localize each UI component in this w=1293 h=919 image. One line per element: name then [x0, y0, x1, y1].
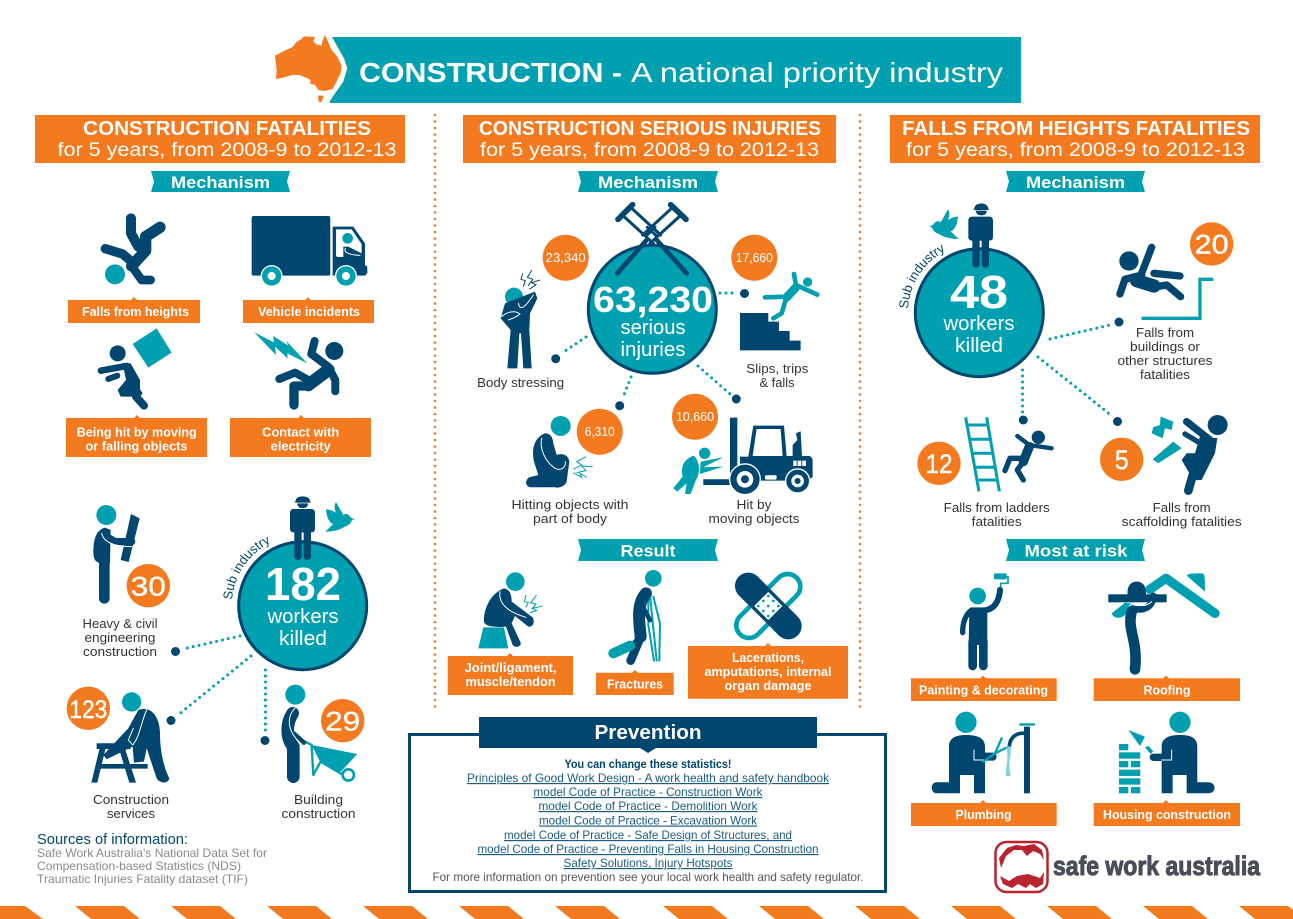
ribbon: mechanism: Mechanism [598, 174, 698, 192]
label: falls from buildings or other structures fatalities: fatalities [1140, 368, 1190, 382]
ribbon: mechanism [578, 171, 718, 192]
ribbon: mechanism [151, 171, 290, 192]
icon: crossed crutches [617, 205, 687, 273]
heading: falls from heights: FALLS FROM HEIGHTS FATALITIES [902, 118, 1250, 140]
dotted connector: slips, trips and falls [720, 289, 749, 298]
dotted connector: hit by moving objects [698, 366, 741, 404]
icon: bricklayer [1119, 712, 1215, 793]
dotted connector: falls from buildings [1050, 318, 1124, 339]
label: contact with electricity: Contact with [262, 426, 339, 440]
panel: prevention [410, 717, 886, 892]
title text: CONSTRUCTION - [359, 57, 622, 88]
logo: safe work australia [996, 842, 1261, 892]
curved label: sub industry: Sub industry [223, 536, 269, 600]
icon: falling from ladder [966, 417, 1052, 491]
central circle: 63,230 serious injuries [588, 245, 716, 373]
label: building construction: construction [282, 807, 356, 821]
label: joint/ligament, muscle/tendon: muscle/tendon [466, 675, 556, 689]
label: contact with electricity [230, 415, 371, 457]
label: painting and decorating [911, 676, 1057, 701]
label: falls from ladders fatalities [944, 501, 1050, 529]
label: hitting objects with part of body: part of body [533, 512, 608, 526]
icon: joint and muscle pain [478, 572, 543, 648]
sources of information: Safe Work Australia's National Data Set for [37, 847, 267, 860]
label: lacerations, amputations, internal organ damage: organ damage [724, 679, 812, 693]
icon: crossed bandages [729, 567, 807, 645]
label: falls from buildings or other structures fatalities [1118, 326, 1212, 382]
number badge: 6,310: 6,310 [585, 424, 615, 439]
label: plumbing: Plumbing [956, 808, 1012, 822]
number badge: 17,660 [731, 235, 777, 281]
label: falls from scaffolding fatalities [1122, 501, 1242, 529]
regulator note: For more information on prevention see your local work health and safety regulator. [432, 871, 864, 884]
icon: engineer with plans [93, 505, 140, 598]
number badge: 12 [917, 442, 961, 485]
icon: worker with hard hat standing on circle [290, 496, 315, 556]
title banner [270, 32, 1021, 103]
label: fractures [596, 670, 674, 695]
number badge: 20: 20 [1195, 230, 1229, 260]
icon: falling from building [1119, 247, 1213, 318]
label: falls from ladders fatalities: Falls from ladders [944, 501, 1050, 515]
label: lacerations, amputations, internal organ damage: Lacerations, [732, 651, 804, 665]
label: heavy and civil engineering construction: Heavy & civil [82, 617, 158, 631]
label: being hit by moving or falling objects: Being hit by moving [77, 426, 197, 440]
prevention call to action: You can change these statistics! [564, 758, 732, 771]
label: joint/ligament, muscle/tendon: Joint/ligament, [464, 661, 556, 675]
label: fractures: Fractures [607, 678, 663, 692]
heading: prevention: Prevention [594, 722, 702, 744]
label: hitting objects with part of body [512, 498, 629, 526]
heading: construction fatalities: CONSTRUCTION FATALITIES [83, 118, 371, 140]
icon: truck [252, 216, 367, 287]
number badge: 29 [321, 699, 364, 742]
list of prevention links: Safety Solutions, Injury Hotspots [564, 857, 733, 870]
icon: contact with electricity [254, 332, 343, 405]
label: falls from scaffolding fatalities: scaffolding fatalities [1122, 515, 1242, 529]
icon: falls from heights [105, 218, 160, 284]
heading: serious injuries [463, 115, 836, 163]
ribbon: mechanism: Mechanism [171, 174, 270, 192]
icon: dove [929, 209, 959, 239]
sources of information: Sources of information: [37, 831, 188, 848]
icon: body stressing [501, 270, 540, 368]
heading: prevention [479, 717, 817, 753]
number badge: 10,660: 10,660 [676, 409, 714, 424]
icon: roofer [1108, 573, 1215, 669]
curved label: sub industry: Sub industry [899, 244, 944, 308]
label: housing construction [1094, 800, 1240, 826]
label: body stressing: Body stressing [477, 376, 564, 390]
label: hit by moving objects: moving objects [708, 512, 800, 526]
list of prevention links: model Code of Practice - Preventing Falls in Housing Construction [478, 843, 818, 856]
label: joint/ligament, muscle/tendon [448, 653, 573, 695]
label: plumbing [911, 800, 1057, 826]
icon: worker with wheelbarrow [285, 685, 357, 781]
sub industry circle: 48 workers killed: 48 [950, 266, 1008, 318]
ribbon: most at risk [1006, 539, 1145, 561]
title text: A national priority industry [631, 57, 1003, 88]
logo: safe work australia: safe work australia [1053, 851, 1261, 881]
panel: construction serious injuries [448, 115, 848, 699]
central circle: 63,230 serious injuries: serious [620, 317, 686, 339]
ribbon: result [578, 539, 718, 561]
label: falls from buildings or other structures fatalities: buildings or [1130, 340, 1200, 354]
label: vehicle incidents [243, 297, 374, 323]
sources of information: Compensation-based Statistics (NDS) [37, 860, 241, 873]
dotted connector: construction services [166, 656, 251, 725]
icon: dove [325, 502, 355, 532]
number badge: 123: 123 [69, 696, 107, 724]
dotted connector: building construction [260, 670, 270, 745]
heading: construction fatalities: for 5 years, from 2008-9 to 2012-13 [58, 140, 396, 161]
label: falls from ladders fatalities: fatalities [972, 515, 1022, 529]
bottom hazard stripes [0, 906, 1293, 919]
number badge: 10,660 [672, 394, 718, 440]
number badge: 6,310 [577, 409, 623, 455]
number badge: 23,340: 23,340 [546, 250, 586, 265]
list of prevention links: model Code of Practice - Construction Work [534, 786, 763, 799]
number badge: 29: 29 [325, 706, 360, 736]
icon: worker with hard hat standing on circle [968, 203, 993, 264]
label: vehicle incidents: Vehicle incidents [258, 305, 360, 319]
label: slips, trips and falls: Slips, trips [746, 362, 808, 376]
sub industry circle: 48 workers killed: workers [942, 313, 1014, 335]
icon: map of Australia [270, 32, 347, 103]
label: construction services: services [107, 807, 155, 821]
panel: construction fatalities [35, 115, 405, 917]
ribbon: result: Result [620, 542, 676, 560]
sub industry circle: 48 workers killed: killed [955, 335, 1003, 357]
label: falls from buildings or other structures fatalities: other structures [1118, 354, 1212, 368]
label: falls from heights [68, 297, 200, 323]
label: falls from scaffolding fatalities: Falls from [1153, 501, 1211, 515]
icon: painter [963, 573, 1008, 666]
heading: construction fatalities [35, 115, 405, 163]
icon: being hit by falling object [101, 328, 172, 406]
heading: falls from heights: for 5 years, from 2008-9 to 2012-13 [906, 140, 1245, 161]
dotted connector: body stressing [551, 337, 586, 363]
list of prevention links: Principles of Good Work Design - A work health and safety handbook [467, 772, 829, 785]
number badge: 12: 12 [926, 449, 952, 479]
sub industry circle: 182 workers killed: 182 [265, 558, 341, 610]
label: being hit by moving or falling objects [66, 415, 207, 457]
list of prevention links: model Code of Practice - Demolition Work [538, 800, 758, 813]
icon: worker at sawhorse [91, 692, 169, 783]
title text [359, 57, 1003, 88]
number badge: 5 [1100, 438, 1143, 481]
heading: serious injuries: CONSTRUCTION SERIOUS INJURIES [479, 118, 821, 140]
sub industry circle: 182 workers killed [239, 542, 367, 670]
label: slips, trips and falls: & falls [760, 376, 794, 390]
sources of information [37, 831, 267, 886]
label: hit by moving objects: Hit by [736, 498, 772, 512]
dotted connector: falls from scaffolding [1038, 357, 1122, 426]
label: heavy and civil engineering construction: engineering [84, 631, 156, 645]
list of prevention links: model Code of Practice - Excavation Work [539, 814, 757, 828]
dotted connector: falls from ladders [1019, 370, 1028, 424]
ribbon: most at risk: Most at risk [1024, 542, 1128, 560]
icon: falling from scaffolding [1152, 415, 1228, 491]
label: painting and decorating: Painting & decorating [919, 684, 1048, 698]
label: falls from buildings or other structures fatalities: Falls from [1136, 326, 1194, 340]
sub industry circle: 182 workers killed: workers [266, 606, 338, 628]
heading: falls from heights [890, 115, 1260, 163]
dotted connector: heavy and civil [171, 636, 240, 656]
label: roofing [1094, 676, 1240, 701]
number badge: 17,660: 17,660 [736, 250, 773, 265]
label: housing construction: Housing construction [1103, 808, 1231, 822]
number badge: 30 [127, 564, 170, 607]
central circle: 63,230 serious injuries: injuries [620, 339, 686, 361]
number badge: 5: 5 [1115, 445, 1129, 475]
list of prevention links: model Code of Practice - Safe Design of Structures, and [504, 829, 792, 842]
label: heavy and civil engineering construction: construction [83, 645, 157, 659]
icon: hitting objects with part of body [526, 416, 593, 488]
icon: hit by forklift [673, 418, 813, 495]
label: lacerations, amputations, internal organ damage [688, 643, 848, 699]
sub industry circle: 182 workers killed: killed [279, 628, 327, 650]
number badge: 123 [67, 687, 110, 730]
sub industry circle: 48 workers killed [915, 249, 1043, 377]
label: roofing: Roofing [1144, 684, 1190, 698]
label: hitting objects with part of body: Hitting objects with [512, 498, 629, 512]
icon: slips, trips and falls [740, 274, 817, 350]
panel: falls from heights fatalities [890, 115, 1261, 894]
label: contact with electricity: electricity [271, 440, 331, 454]
ribbon: mechanism [1006, 171, 1145, 192]
central circle: 63,230 serious injuries: 63,230 [593, 279, 713, 320]
list of prevention links [467, 772, 829, 870]
heading: serious injuries: for 5 years, from 2008-9 to 2012-13 [480, 140, 819, 161]
number badge: 20 [1190, 222, 1233, 266]
sources of information: Traumatic Injuries Fatality dataset (TIF) [37, 873, 248, 886]
ribbon: mechanism: Mechanism [1026, 174, 1125, 192]
icon: plumber [932, 712, 1035, 793]
label: building construction [282, 793, 356, 821]
label: construction services [93, 793, 169, 821]
label: slips, trips and falls [746, 362, 808, 390]
number badge: 30: 30 [131, 572, 166, 602]
label: heavy and civil engineering construction [82, 617, 158, 659]
icon: fracture with crutches [613, 570, 662, 661]
label: lacerations, amputations, internal organ damage: amputations, internal [704, 665, 832, 679]
label: hit by moving objects [708, 498, 800, 526]
number badge: 23,340 [543, 235, 589, 281]
label: being hit by moving or falling objects: or falling objects [86, 440, 188, 454]
label: construction services: Construction [93, 793, 169, 807]
label: building construction: Building [294, 793, 343, 807]
dotted connector: hitting objects [615, 377, 631, 410]
label: falls from heights: Falls from heights [82, 305, 189, 319]
